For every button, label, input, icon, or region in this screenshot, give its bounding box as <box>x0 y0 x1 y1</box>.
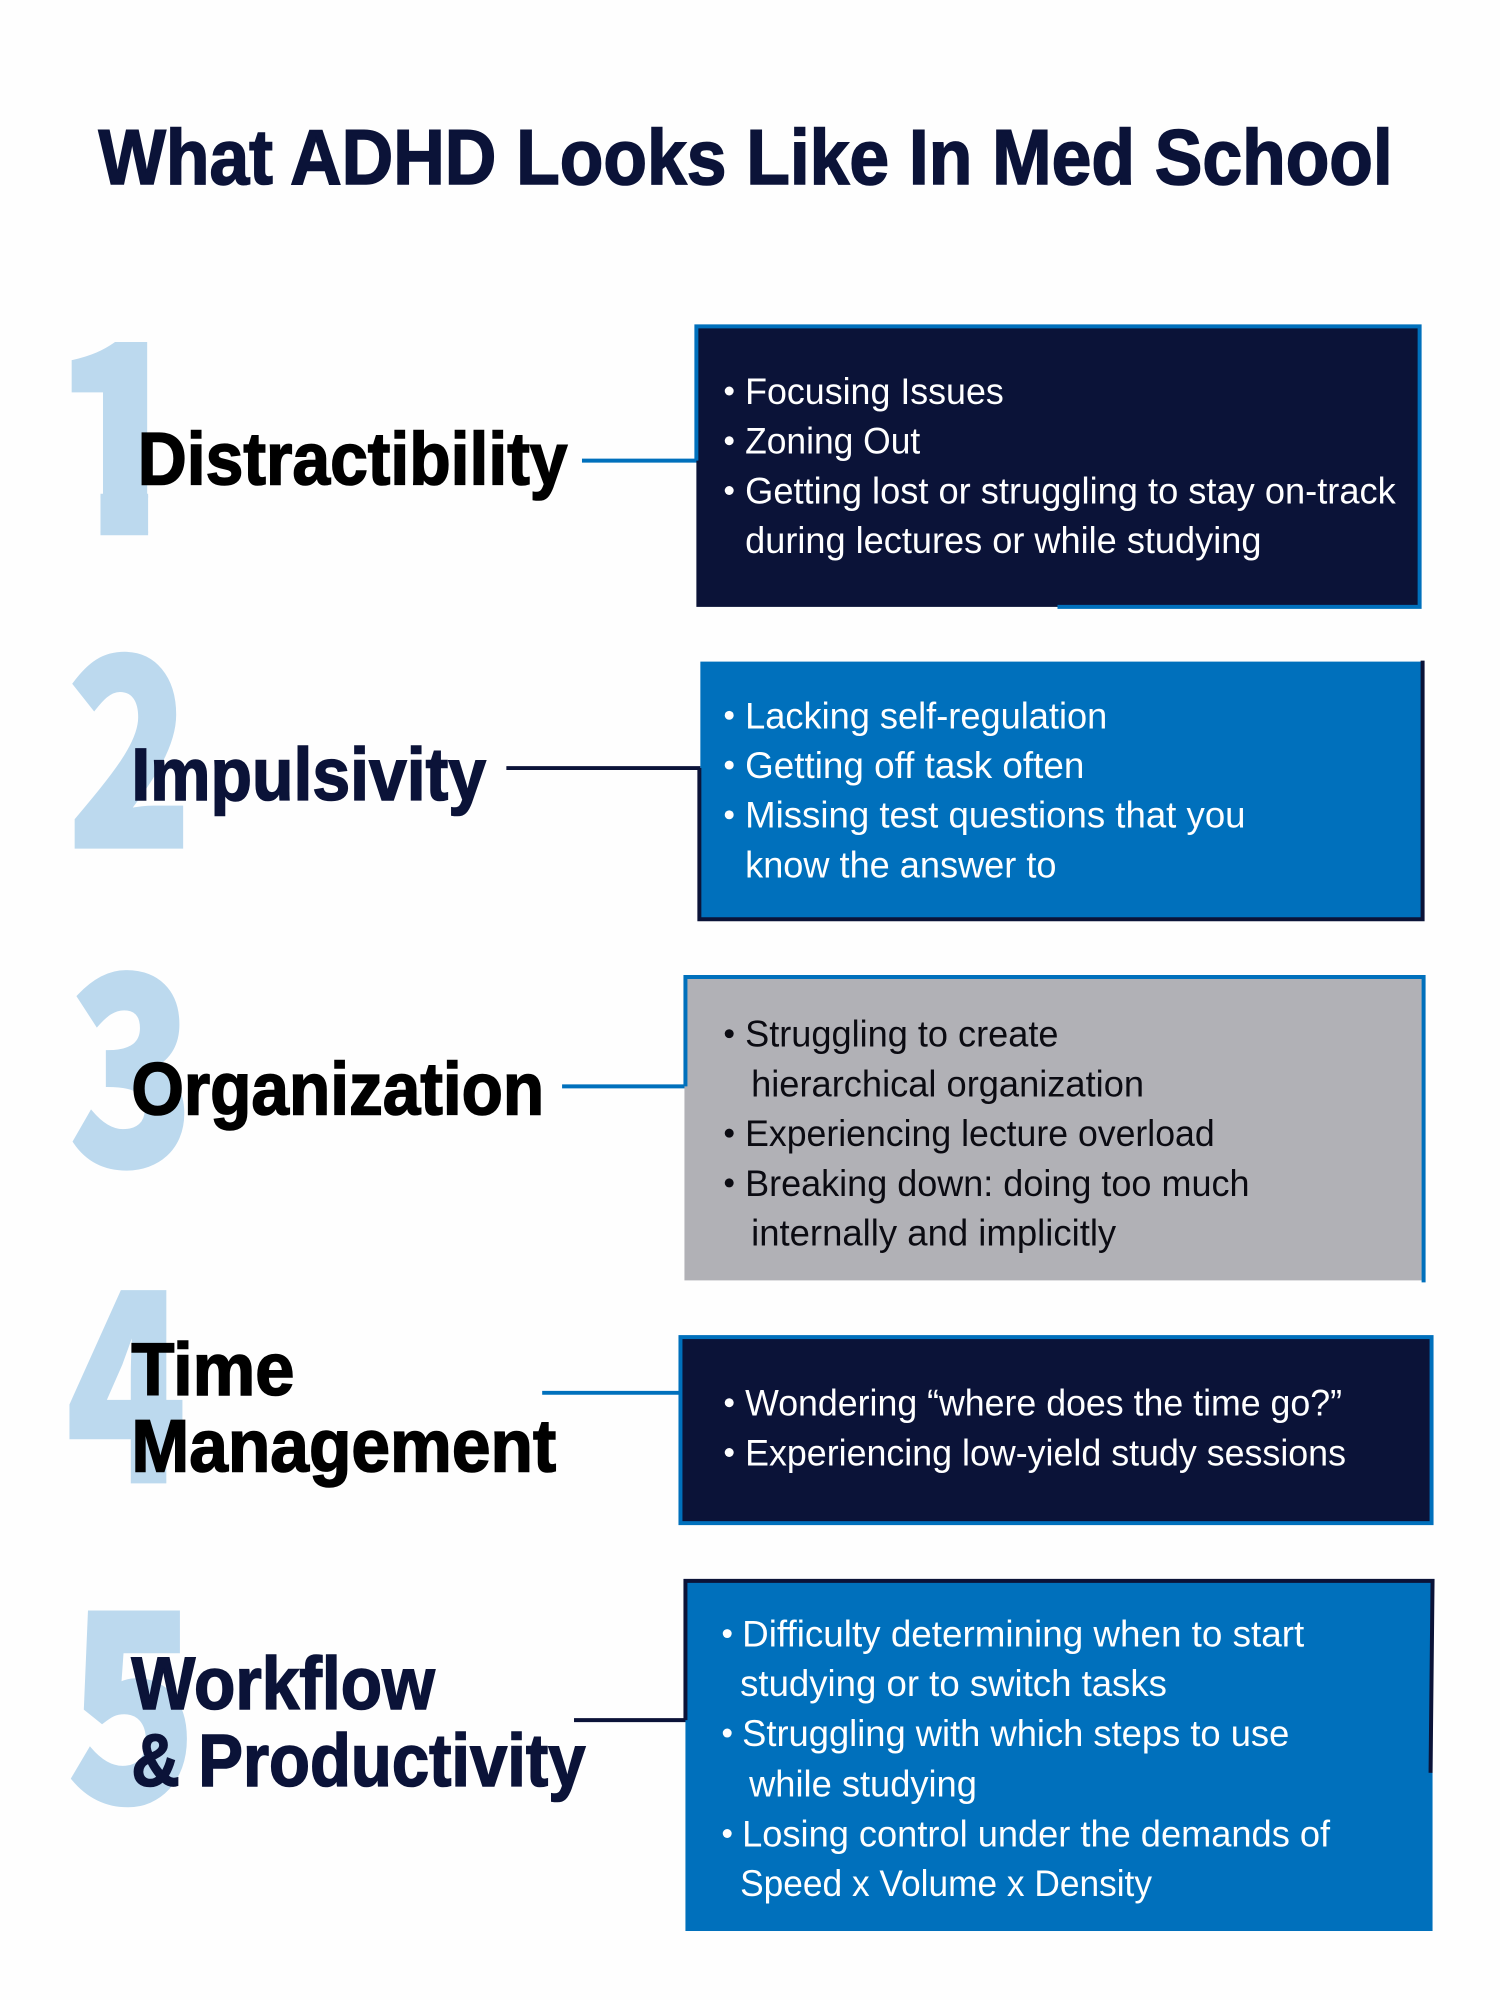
connector line <box>562 1084 686 1088</box>
panel: distractibility symptoms: during lectures or while studying <box>745 520 1261 561</box>
panel: organization symptoms: Experiencing lecture overload <box>745 1113 1215 1154</box>
section 2: impulsivity <box>68 546 1423 923</box>
panel: impulsivity symptoms: Getting off task often <box>745 745 1084 786</box>
panel: impulsivity symptoms: Missing test questions that you <box>745 795 1246 836</box>
panel: organization symptoms <box>684 976 1424 1282</box>
panel: workflow symptoms: Speed x Volume x Density <box>740 1863 1153 1904</box>
panel: workflow symptoms <box>685 1580 1433 1931</box>
heading: Workflow & Productivity <box>131 1641 586 1802</box>
panel: distractibility symptoms: Getting lost or struggling to stay on-track <box>745 470 1396 511</box>
panel: impulsivity symptoms <box>699 661 1423 920</box>
heading: Time Management: Management <box>131 1403 556 1487</box>
heading: Time Management: Time <box>131 1327 294 1411</box>
panel: workflow symptoms: Losing control under the demands of <box>742 1813 1331 1854</box>
number 5: 5 <box>68 1501 197 1878</box>
number 3: 3 <box>70 864 194 1241</box>
panel: workflow symptoms: while studying <box>748 1764 977 1805</box>
section 5: workflow and productivity <box>68 1501 1433 1931</box>
title: What ADHD Looks Like In Med School <box>98 115 1393 201</box>
panel: distractibility symptoms: Focusing Issues <box>745 371 1004 412</box>
number 1: 1 <box>51 232 190 609</box>
number 2: 2 <box>68 546 192 923</box>
connector line <box>506 766 700 770</box>
panel: organization symptoms: internally and implicitly <box>751 1213 1117 1254</box>
heading: Time Management <box>131 1327 556 1487</box>
panel: time management symptoms: Wondering “where does the time go?” <box>745 1383 1342 1424</box>
panel: time management symptoms: Experiencing low-yield study sessions <box>745 1432 1346 1473</box>
panel: organization symptoms: hierarchical organization <box>751 1063 1144 1104</box>
number 4: 4 <box>67 1180 186 1557</box>
panel: impulsivity symptoms: know the answer to <box>745 844 1057 885</box>
panel: organization symptoms: Struggling to create <box>745 1014 1058 1055</box>
section 3: organization <box>70 864 1424 1282</box>
connector line <box>582 459 698 463</box>
panel: organization symptoms: Breaking down: doing too much <box>745 1163 1250 1204</box>
connector line <box>574 1718 686 1722</box>
panel: distractibility symptoms <box>696 325 1421 607</box>
panel: workflow symptoms: Difficulty determining when to start <box>742 1613 1304 1654</box>
heading: Impulsivity: Impulsivity <box>131 732 486 816</box>
panel: impulsivity symptoms: Lacking self-regulation <box>745 695 1107 736</box>
heading: Distractibility: Distractibility <box>138 417 568 501</box>
heading: Workflow & Productivity: & Productivity <box>131 1718 586 1802</box>
panel: workflow symptoms: studying or to switch tasks <box>740 1663 1167 1704</box>
section 1: distractibility <box>51 232 1421 609</box>
heading: Workflow & Productivity: Workflow <box>131 1641 436 1725</box>
panel: workflow symptoms: Struggling with which steps to use <box>742 1713 1289 1754</box>
panel: time management symptoms <box>680 1336 1432 1523</box>
section 4: time management <box>67 1180 1432 1557</box>
heading: Organization: Organization <box>131 1046 544 1130</box>
panel: distractibility symptoms: Zoning Out <box>745 421 920 462</box>
connector line <box>542 1391 681 1395</box>
